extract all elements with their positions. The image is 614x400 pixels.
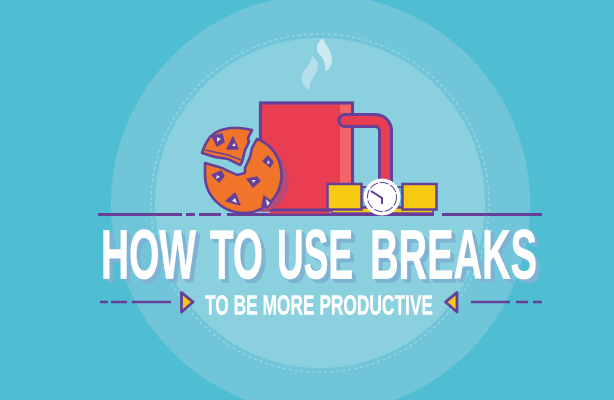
- mug handle: [345, 120, 386, 186]
- cookie: [202, 128, 288, 213]
- title: [101, 216, 541, 298]
- watch strap left: [328, 184, 362, 210]
- subtitle: TO BE MORE PRODUCTIVE: [205, 290, 433, 320]
- chip highlights: [216, 137, 270, 206]
- left arrow marker: [182, 292, 193, 312]
- cookie shadow: [240, 140, 288, 212]
- steam: [302, 38, 332, 90]
- ground line: [98, 213, 542, 216]
- title text: TO: [210, 216, 263, 294]
- title text: USE: [277, 216, 353, 294]
- inner background circle: [155, 38, 485, 368]
- title shadow: USE: [279, 218, 355, 296]
- title shadow: USE: [281, 220, 357, 298]
- watch face: [364, 178, 400, 216]
- title shadow: TO: [212, 218, 265, 296]
- right subtitle dashes: [471, 301, 542, 303]
- title text: HOW: [101, 216, 196, 294]
- title shadow: HOW: [105, 220, 200, 298]
- watch strap right: [402, 184, 436, 210]
- left subtitle dashes: [100, 301, 171, 303]
- outer background circle: [111, 0, 530, 400]
- title shadow: [103, 218, 541, 298]
- chocolate chips: [212, 134, 273, 208]
- title text: [101, 216, 537, 294]
- mug: [260, 103, 386, 214]
- title shadow: TO: [214, 220, 267, 298]
- right arrow marker: [446, 292, 457, 312]
- cookie lower part: [205, 139, 282, 213]
- cookie broken piece: [202, 128, 252, 165]
- watch strap base: [332, 208, 433, 213]
- title shadow: HOW: [103, 218, 198, 296]
- watch: [328, 178, 436, 216]
- mug body: [260, 103, 352, 210]
